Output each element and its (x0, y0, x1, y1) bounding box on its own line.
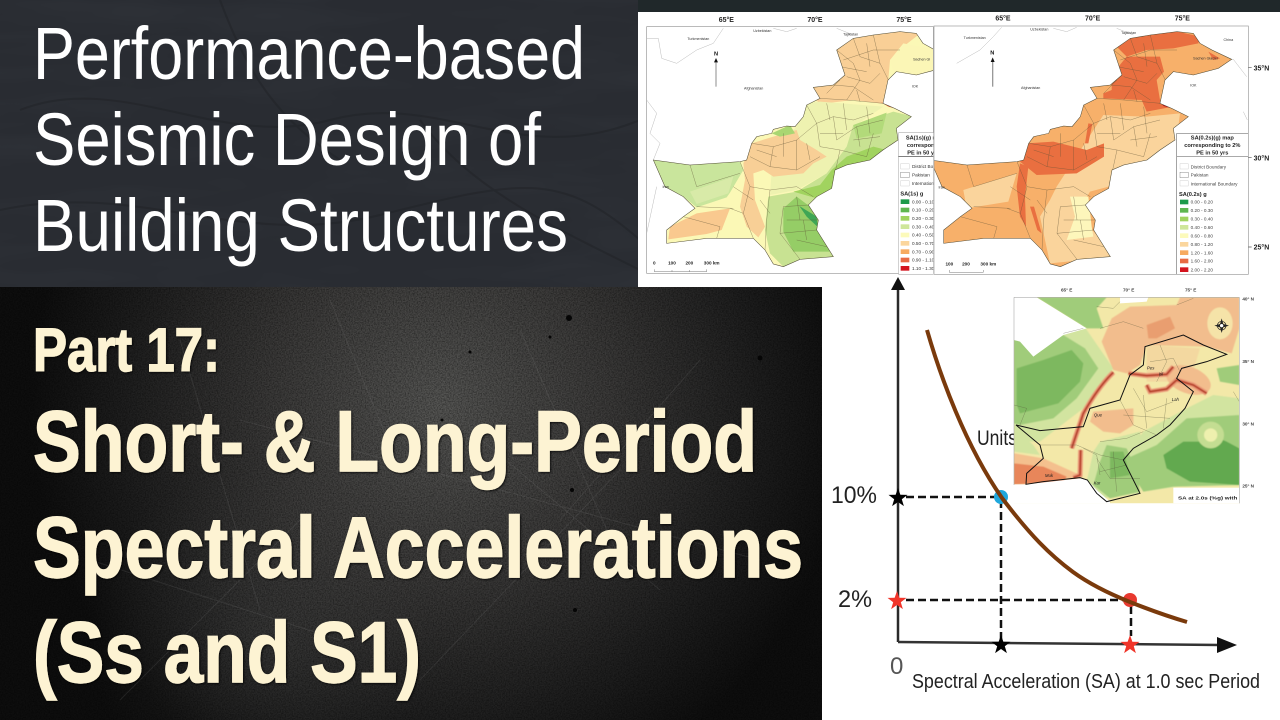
legend SA 0.2s (1177, 133, 1248, 274)
longitude labels: 75°E (896, 16, 912, 24)
legend SA 0.2s: corresponding to 2% (1184, 143, 1240, 149)
place names: Turkmenistan (687, 37, 709, 41)
city labels: Isl (1159, 372, 1164, 377)
axis label: Units: Units (977, 427, 1017, 450)
star: red on x axis (1120, 635, 1140, 653)
city labels: Kar (1094, 480, 1101, 485)
subtitle (33, 316, 803, 701)
map caption box (1173, 488, 1239, 503)
scale bar: 0 (653, 260, 656, 265)
north arrow: N (990, 50, 994, 56)
longitude labels: 65°E (995, 15, 1011, 23)
title (33, 12, 585, 267)
fault core (1072, 367, 1207, 478)
label: origin: 0 (890, 653, 903, 680)
longitude labels (995, 15, 1190, 23)
place names: Uzbekistan (1030, 28, 1048, 32)
marker: 10 percent point (994, 490, 1008, 504)
north arrow (714, 52, 718, 87)
star: black on y axis (888, 488, 908, 506)
north peach zones (1102, 298, 1239, 373)
legend SA 0.2s: 0.30 - 0.40 (1191, 217, 1213, 222)
Pakistan border (1016, 335, 1227, 502)
city labels: Que (1094, 412, 1103, 417)
east green zones (1140, 394, 1239, 488)
legend SA 1s: 0.10 - 0.20 (912, 208, 935, 213)
legend SA 0.2s: 1.60 - 2.00 (1191, 259, 1213, 264)
panel: heading background (0, 0, 640, 287)
scale bar (653, 260, 720, 272)
place names: Iran (663, 185, 669, 189)
title: Performance-based (33, 12, 585, 95)
Pakistan zones (654, 32, 933, 266)
scale bar: 100 (668, 260, 676, 265)
longitude labels: 75°E (1175, 15, 1190, 23)
central peach zone (1090, 408, 1133, 433)
legend SA 0.2s: SA(0.2s) g (1179, 192, 1207, 198)
place names (663, 29, 930, 189)
legend SA 1s: 0.40 - 0.50 (912, 233, 935, 238)
latitude labels: 30° N (1242, 421, 1255, 426)
latitude labels (1242, 296, 1255, 489)
dashed guides (906, 497, 1131, 640)
longitude labels: 65°E (719, 16, 734, 24)
label: 10 percent: 10% (831, 482, 877, 509)
title: Seismic Design of (33, 98, 541, 181)
scale bar: 200 (962, 261, 970, 266)
panel: SA 1s hazard map (647, 16, 960, 274)
legend SA 0.2s: 1.20 - 1.60 (1191, 250, 1213, 255)
marker: 2 percent point (1123, 593, 1137, 607)
north arrow (990, 50, 995, 87)
legend SA 1s: corresponding (907, 143, 947, 149)
longitude labels: 75° E (1185, 288, 1196, 293)
legend SA 0.2s: 0.20 - 0.30 (1191, 208, 1213, 213)
latitude labels: 35°N (1254, 64, 1269, 72)
legend SA 0.2s: PE in 50 yrs (1196, 151, 1228, 157)
topic line 2: Spectral Accelerations (33, 500, 803, 596)
legend SA 0.2s: 0.40 - 0.60 (1191, 225, 1213, 230)
part number: Part 17: (33, 316, 220, 384)
topic line 1: Short- & Long-Period (33, 394, 757, 490)
panel: top strip above maps (638, 0, 1280, 12)
Sindh green zones (1093, 445, 1140, 498)
place names: Afghanistan (744, 87, 763, 91)
legend SA 1s: 0.20 - 0.30 (912, 216, 935, 221)
place names: Uzbekistan (753, 29, 771, 33)
north arrow: N (714, 52, 718, 58)
legend SA 0.2s: 0.60 - 0.80 (1191, 233, 1213, 238)
city labels: Pes (1147, 366, 1155, 371)
place names: Sachen Glacier (1193, 57, 1219, 61)
longitude labels: 70°E (807, 16, 823, 24)
title: Building Structures (33, 184, 568, 267)
topic line 3: (Ss and S1) (33, 605, 421, 701)
scale bar: 200 (685, 260, 694, 265)
legend SA 1s: 0.00 - 0.10 (912, 199, 935, 204)
label: 2 percent: 2% (838, 586, 872, 613)
place names: Afghanistan (1021, 86, 1040, 90)
legend SA 1s: 0.30 - 0.40 (912, 224, 935, 229)
legend SA 1s: PE in 50 yrs (907, 151, 939, 157)
place names: Turkmenistan (964, 36, 986, 40)
chart: hazard curve (831, 277, 1260, 693)
scale bar: 300 km (704, 260, 720, 265)
place names: Tajikistan (1121, 31, 1136, 35)
panel: chart backdrop (822, 287, 1280, 720)
legend SA 1s: 0.70 - 0.90 (912, 249, 935, 254)
city labels (1045, 366, 1180, 485)
legend SA 0.2s: 0.00 - 0.20 (1191, 200, 1213, 205)
legend SA 0.2s: 2.00 - 2.20 (1191, 267, 1213, 272)
legend SA 1s: 0.50 - 0.70 (912, 241, 935, 246)
latitude labels (1248, 64, 1269, 252)
city labels: Muk (1045, 473, 1054, 478)
central light green (1087, 432, 1143, 498)
y axis (891, 277, 905, 642)
latitude labels: 40° N (1242, 296, 1255, 301)
white sea area (1014, 478, 1110, 505)
place names: China (1224, 38, 1234, 42)
legend SA 1s: 0.90 - 1.10 (912, 258, 935, 263)
legend SA 1s: District Boundary (912, 164, 948, 169)
west green zones (1014, 325, 1113, 442)
longitude labels (719, 16, 912, 24)
map caption box: SA at 2.0s (%g) with (1178, 496, 1238, 501)
star: black on x axis (992, 635, 1010, 653)
panel: maps backdrop (638, 12, 1280, 287)
place names: Iran (939, 185, 945, 189)
x axis (898, 637, 1237, 653)
legend SA 0.2s: SA(0.2s)(g) map (1191, 135, 1234, 141)
place names: Tajikistan (843, 32, 858, 36)
city labels: Lah (1172, 397, 1180, 402)
legend SA 0.2s: District Boundary (1191, 164, 1227, 169)
place names: Sachen Gl (913, 57, 930, 61)
neighbouring country borders (647, 28, 854, 232)
panel: SA 2.0s hazard map (1014, 288, 1255, 505)
legend SA 1s: Pakistan (912, 173, 930, 178)
longitude labels: 70° E (1123, 288, 1134, 293)
longitude labels: 65° E (1061, 288, 1072, 293)
white Afghanistan gap (1014, 297, 1087, 357)
curve (927, 330, 1187, 622)
place names: IOK (1190, 84, 1197, 88)
longitude labels: 70°E (1085, 15, 1101, 23)
fault glow (1072, 367, 1207, 478)
legend SA 1s: 1.10 - 1.30 (912, 266, 935, 271)
legend SA 0.2s: International Boundary (1191, 181, 1238, 186)
star: red on y axis (888, 591, 906, 609)
longitude labels (1061, 288, 1196, 293)
scale bar (945, 261, 996, 272)
latitude labels: 30°N (1254, 154, 1269, 162)
latitude labels: 25°N (1254, 244, 1269, 252)
southwest zones (1014, 441, 1040, 455)
latitude labels: 35° N (1242, 359, 1255, 364)
panel: SA 0.2s hazard map (917, 15, 1269, 274)
legend SA 0.2s: 0.80 - 1.20 (1191, 242, 1213, 247)
neighbouring country borders (957, 27, 1247, 120)
scale bar: 100 (945, 261, 954, 266)
compass (1214, 318, 1229, 333)
legend SA 1s: International Boundary (912, 181, 960, 186)
legend SA 1s: SA(1s) g (900, 192, 924, 198)
place names: IOK (912, 84, 919, 88)
place names (939, 28, 1234, 189)
latitude labels: 25° N (1242, 484, 1255, 489)
legend SA 1s (898, 132, 934, 274)
panel: scratched metal background (0, 287, 822, 720)
Pakistan zones (934, 32, 1232, 266)
legend SA 1s: SA(1s)(g) map (906, 135, 945, 141)
district lines (1014, 298, 1239, 492)
scale bar: 300 km (980, 261, 996, 266)
legend SA 0.2s: Pakistan (1191, 173, 1209, 178)
